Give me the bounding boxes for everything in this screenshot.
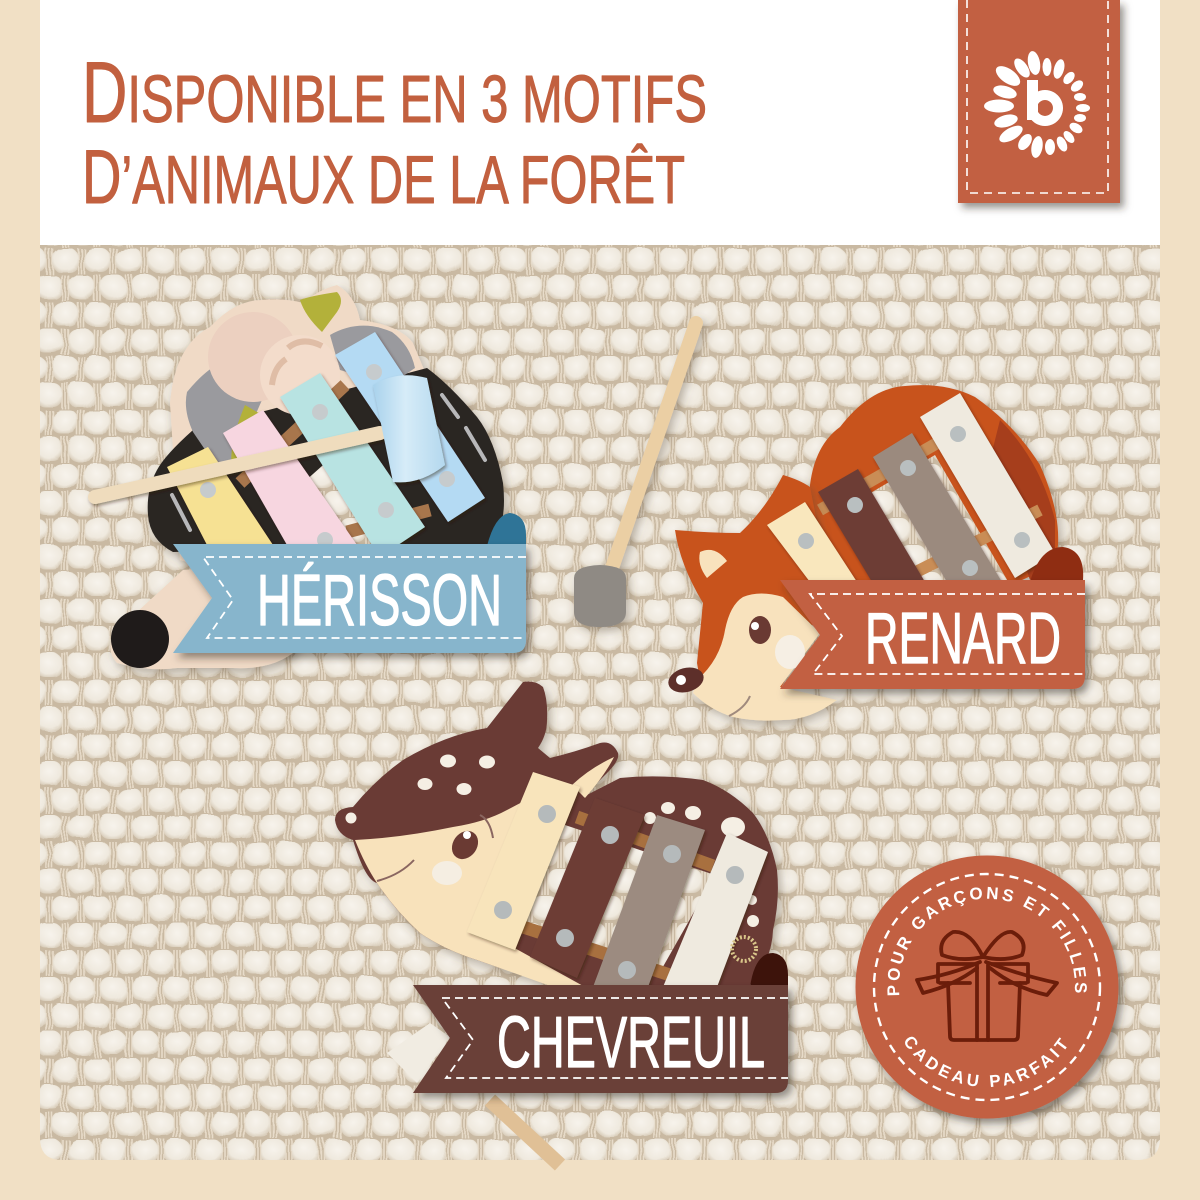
hedgehog quill marks [172,395,485,530]
hedgehog mallet [95,375,445,497]
fox ear, eye, cheek, nose [666,550,805,716]
icon: gift box [917,932,1057,1040]
rug gap [850,455,1010,585]
hedgehog grey and flowers [186,292,415,472]
fox head [675,475,837,721]
wooden rails [240,385,430,532]
xylophone bars [467,772,768,987]
center mallet [574,323,696,627]
header panel [40,0,1160,246]
rivets [494,805,744,979]
deer eye, cheek, spots [346,754,759,927]
fox xylophone [666,385,1058,721]
seal text bottom: CADEAU PARFAIT [905,1036,1067,1087]
ribbon: fox: RENARD [865,599,1061,679]
title: DISPONIBLE EN 3 MOTIFS [82,45,707,141]
rug gap [295,450,400,545]
hedgehog wood body [110,285,504,669]
rivets [200,364,455,548]
rug gap [525,825,715,972]
ribbon: fox [780,547,1085,689]
hedgehog nose [111,610,169,668]
brand tag with logo [958,0,1120,203]
ribbon: hedgehog: HÉRISSON [257,561,502,641]
seal: perfect gift [854,855,1128,1129]
xylophone bars [167,332,485,545]
small logo [732,937,756,961]
wooden rails [523,817,713,975]
ribbon: hedgehog [173,513,526,653]
title [82,45,707,220]
woven rug photo background [30,235,1170,1170]
wooden rails [820,430,1040,590]
bottom mallet [387,1023,560,1165]
deer inner ear [572,757,614,798]
rivets [798,426,1030,576]
title: D’ANIMAUX DE LA FORÊT [82,135,685,220]
hedgehog xylophone [95,285,504,669]
xylophone bars [767,393,1055,582]
deer xylophone [335,682,778,987]
ribbon: deer: CHEVREUIL [497,1003,765,1083]
seal text top: POUR GARÇONS ET FILLES [887,886,1087,996]
deer cream face [355,790,585,987]
icon: sunflower b logo [984,50,1090,159]
ribbon: deer [413,953,788,1093]
fox body [810,385,1058,590]
fox shaded side [990,420,1055,580]
deer body and head [335,682,778,985]
